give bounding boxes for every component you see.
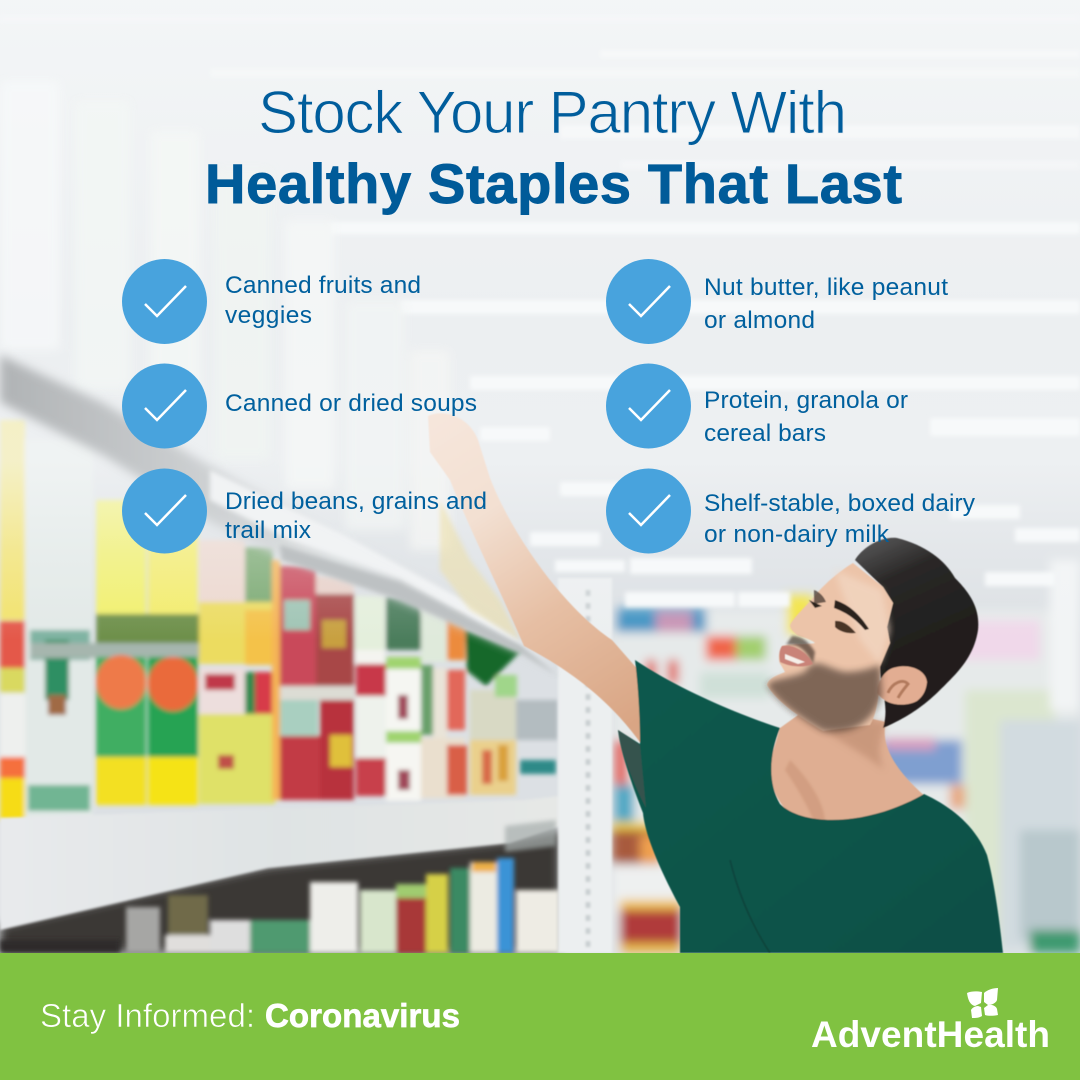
item: canned fruits and veggies: Canned fruits and bbox=[225, 272, 421, 299]
footer topic: Coronavirus bbox=[265, 997, 460, 1034]
ceiling lights bbox=[0, 15, 1080, 607]
ear bbox=[877, 666, 927, 705]
item: shelf-stable milk: or non-dairy milk bbox=[704, 521, 890, 548]
footer text: Stay Informed: bbox=[40, 997, 255, 1034]
shelf products bbox=[0, 420, 558, 820]
item: nut butter: Nut butter, like peanut bbox=[704, 274, 948, 301]
face bbox=[767, 563, 893, 731]
item: shelf-stable milk bbox=[606, 468, 976, 554]
icon: AdventHealth flower bbox=[967, 988, 998, 1018]
checklist left column bbox=[122, 259, 487, 554]
footer band bbox=[0, 953, 1080, 1080]
logo wordmark: AdventHealth bbox=[811, 1014, 1050, 1055]
item: protein, granola or cereal bars bbox=[606, 364, 908, 448]
bright wash over upper photo bbox=[0, 0, 1080, 640]
shirt bbox=[618, 660, 1003, 953]
beard bbox=[767, 663, 882, 732]
item: shelf-stable milk: Shelf-stable, boxed dairy bbox=[704, 490, 976, 517]
item: canned or dried soups bbox=[122, 364, 477, 448]
shelf upright post bbox=[558, 578, 612, 953]
person reaching for a shelf bbox=[428, 413, 1003, 953]
eyebrow and eye bbox=[834, 600, 869, 630]
neck and chest bbox=[771, 705, 926, 826]
arm bbox=[428, 413, 642, 745]
item: protein, granola or cereal bars: cereal bars bbox=[704, 420, 826, 447]
item: dried beans, grains and trail mix bbox=[122, 468, 487, 554]
item: dried beans, grains and trail mix: trail mix bbox=[225, 517, 311, 544]
lower shelf area bbox=[0, 796, 560, 953]
faded upper shelf products bbox=[0, 80, 450, 550]
checklist right column bbox=[606, 259, 976, 554]
item: canned fruits and veggies bbox=[122, 259, 421, 344]
item: protein, granola or cereal bars: Protein, granola or bbox=[704, 387, 908, 414]
title bbox=[205, 79, 902, 215]
back of store shelving bbox=[612, 560, 1080, 953]
title line 2: Healthy Staples That Last bbox=[205, 152, 902, 215]
item: dried beans, grains and trail mix: Dried beans, grains and bbox=[225, 488, 487, 515]
title line 1: Stock Your Pantry With bbox=[258, 79, 847, 146]
lips bbox=[779, 646, 813, 666]
item: canned or dried soups: Canned or dried soups bbox=[225, 390, 477, 417]
item: nut butter: or almond bbox=[704, 307, 815, 334]
item: nut butter bbox=[606, 259, 948, 344]
hair bbox=[855, 538, 978, 728]
top shelf edge bbox=[0, 355, 558, 676]
item: canned fruits and veggies: veggies bbox=[225, 302, 312, 329]
